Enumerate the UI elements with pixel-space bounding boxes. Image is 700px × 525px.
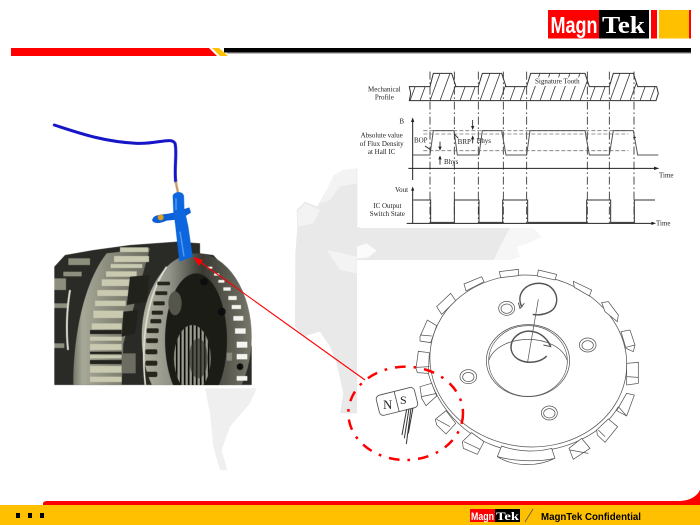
output switch waveform <box>413 200 655 222</box>
mechanical profile label: Mechanical <box>368 86 401 94</box>
chart labels: BOP <box>414 137 428 145</box>
chart labels: at Hall IC <box>368 148 396 156</box>
footer logo: MagnTek <box>470 509 520 523</box>
red leader line <box>193 257 365 380</box>
hysteresis arrows <box>425 120 636 165</box>
footer logo: MagnTek: Magn <box>471 511 494 523</box>
footer logo: MagnTek: Tek <box>496 509 519 523</box>
chart labels: Time <box>656 220 670 228</box>
chart labels: IC Output <box>373 202 401 210</box>
chart labels: BRP <box>458 138 471 146</box>
left ring slots <box>145 282 170 377</box>
copper lead <box>176 182 178 193</box>
mechanical profile with teeth <box>409 73 658 101</box>
centre bore <box>486 325 570 397</box>
front ring <box>141 253 252 386</box>
footer confidentiality text: MagnTek Confidential <box>541 511 641 523</box>
spline teeth <box>90 247 149 382</box>
footer slash <box>525 509 533 522</box>
wheel axis <box>528 299 538 362</box>
splined hub <box>174 325 211 392</box>
mechanical profile label: Profile <box>375 94 394 102</box>
hall sensor magnet: N <box>383 398 392 412</box>
left clutch splines <box>54 258 90 348</box>
blue wire <box>54 125 176 182</box>
chart labels: Switch State <box>370 210 405 218</box>
chart labels: Vout <box>395 186 408 194</box>
dark spline gaps <box>90 275 149 373</box>
hall sensor magnet <box>375 387 419 444</box>
background world map <box>205 168 542 470</box>
flux density thresholds <box>423 131 628 151</box>
rotation arrows <box>520 283 557 315</box>
chart labels: of Flux Density <box>360 140 404 148</box>
chart labels: Absolute value <box>361 132 403 140</box>
header logo: MagnTek: Magn <box>550 12 598 38</box>
hall sensor body <box>152 192 193 262</box>
ring bolts <box>200 278 208 286</box>
header rule <box>11 48 691 56</box>
header logo: MagnTek: Tek <box>602 13 646 39</box>
right ring slots <box>208 267 247 381</box>
flux density waveform <box>413 131 658 155</box>
wheel teeth <box>416 269 638 465</box>
gear assembly <box>54 242 252 386</box>
panel: target wheel drawing <box>348 260 660 478</box>
panel: timing diagram <box>357 60 691 228</box>
chart labels: B <box>399 117 404 125</box>
header logo: MagnTek <box>548 10 691 39</box>
hall sensor magnet: S <box>400 393 407 407</box>
chart labels <box>360 117 673 228</box>
red detail circle <box>348 367 463 460</box>
chart labels: Time <box>659 171 673 179</box>
axes <box>407 117 659 225</box>
switching guide lines <box>430 72 634 223</box>
panel: gear assembly with sensor <box>52 124 252 386</box>
footer page dots <box>16 513 44 518</box>
wheel disc <box>419 262 638 460</box>
chart labels: Bhys <box>477 137 491 145</box>
mounting holes <box>499 301 515 315</box>
wheel lower rim <box>428 373 618 452</box>
chart labels: Bhys <box>444 158 459 166</box>
signature tooth label: Signature Tooth <box>535 78 580 86</box>
footer bar <box>0 490 700 525</box>
